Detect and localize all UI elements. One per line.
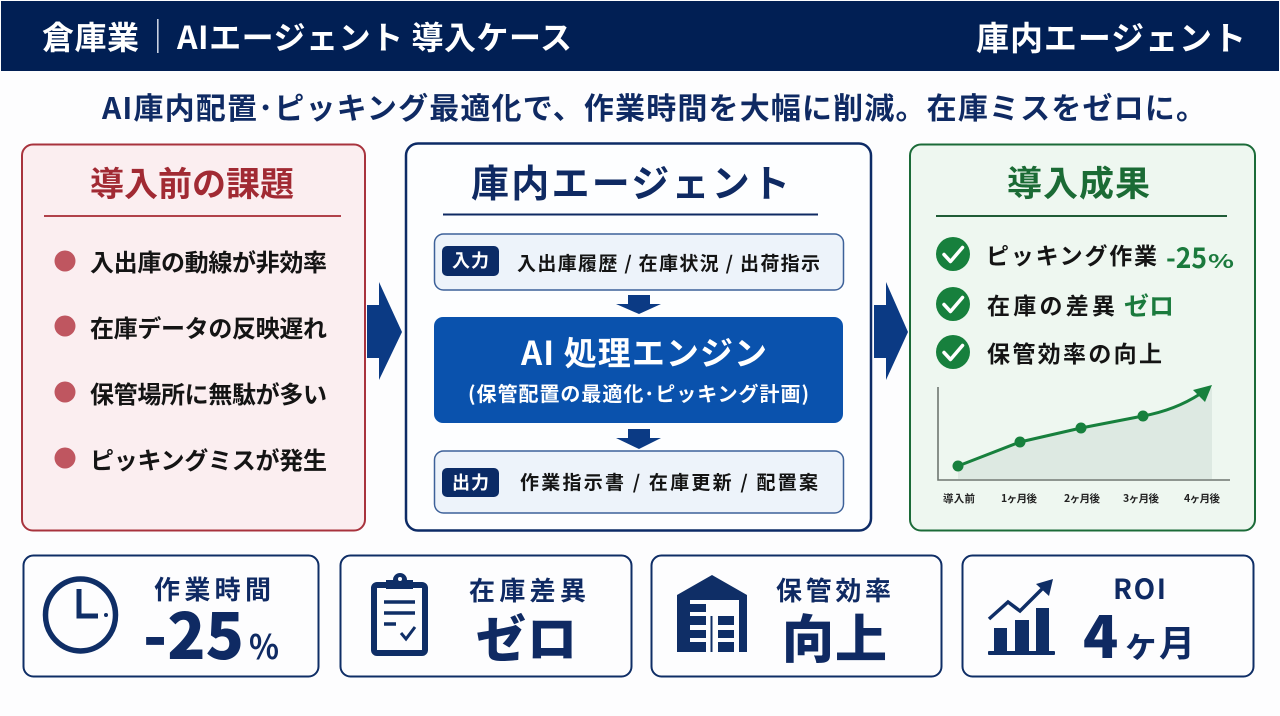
- subtitle: AI庫内配置･ピッキング最適化で、作業時間を大幅に削減。在庫ミスをゼロに。: [101, 84, 1206, 128]
- challenge item 3: 保管場所に無駄が多い: [90, 375, 327, 410]
- KPI value: [1083, 591, 1195, 675]
- line chart: improvement over 4 months: 4ヶ月後: [1184, 491, 1220, 506]
- KPI card: inventory variance: ゼロ: [476, 600, 577, 672]
- KPI card: inventory variance: 在庫差異: [469, 571, 586, 608]
- KPI value: %: [249, 620, 279, 669]
- input row: 入出庫履歴 / 在庫状況 / 出荷指示: [517, 249, 820, 276]
- KPI card: storage efficiency: 向上: [782, 598, 887, 673]
- arrow: input to engine: [616, 295, 661, 314]
- header right label: 庫内エージェント: [976, 12, 1246, 60]
- result item 1: %: [1208, 247, 1234, 274]
- result item 2: [936, 287, 1174, 323]
- result item 1: [936, 237, 1234, 277]
- KPI card: storage efficiency: [652, 556, 942, 676]
- KPI card: work time: [24, 556, 318, 678]
- arrow: challenges to agent: [367, 282, 402, 380]
- icon: clock: [46, 579, 116, 651]
- panel heading: agent: 庫内エージェント: [471, 153, 790, 208]
- result item 1: ピッキング作業: [986, 237, 1157, 271]
- KPI card: inventory variance: [340, 556, 632, 676]
- input badge: [442, 246, 499, 276]
- AI engine block: AI 処理エンジン: [520, 327, 767, 375]
- challenge item 4: ピッキングミスが発生: [90, 441, 327, 476]
- header title: AIエージェント 導入ケース: [176, 13, 572, 59]
- line chart: improvement over 4 months: 導入前: [943, 491, 976, 506]
- input row: [434, 234, 844, 290]
- panel heading: results: 導入成果: [1007, 156, 1150, 207]
- KPI card: work time: 作業時間: [154, 570, 271, 607]
- result item 2: 在庫の差異: [987, 287, 1115, 321]
- result item 1: -25: [1166, 237, 1207, 277]
- line chart: improvement over 4 months: 1ヶ月後: [1001, 491, 1038, 506]
- output row: [434, 451, 844, 513]
- result item 3: 保管効率の向上: [987, 335, 1162, 369]
- line chart: improvement over 4 months: 2ヶ月後: [1064, 491, 1100, 506]
- KPI card: ROI: ROI: [1113, 568, 1166, 608]
- output badge: [442, 468, 499, 497]
- arrow: engine to output: [616, 429, 661, 449]
- header bar: [1, 1, 1279, 71]
- icon: rising bar chart: [988, 579, 1055, 655]
- KPI card: ROI: [962, 556, 1254, 676]
- panel: before challenges: [22, 144, 365, 530]
- panel heading: challenges: 導入前の課題: [90, 157, 294, 206]
- line chart: improvement over 4 months: 3ヶ月後: [1123, 491, 1160, 506]
- AI engine block: (保管配置の最適化･ピッキング計画): [468, 378, 809, 407]
- header title: 倉庫業: [42, 13, 139, 59]
- KPI value: 4: [1083, 591, 1118, 675]
- panel: results: [910, 144, 1255, 530]
- arrow: agent to results: [874, 282, 908, 380]
- AI engine block: [434, 317, 843, 423]
- challenge item 1: 入出庫の動線が非効率: [90, 243, 327, 278]
- icon: clipboard: [374, 573, 425, 653]
- KPI value: -25: [143, 587, 244, 678]
- result item 2: ゼロ: [1124, 287, 1174, 323]
- output badge: 出力: [452, 469, 489, 495]
- icon: warehouse: [677, 575, 747, 652]
- output row: 作業指示書 / 在庫更新 / 配置案: [520, 468, 818, 495]
- KPI value: ヶ月: [1123, 615, 1195, 667]
- input badge: 入力: [452, 247, 489, 273]
- line chart: improvement over 4 months: [938, 385, 1230, 506]
- panel: warehouse agent: [406, 144, 871, 530]
- challenge item 2: 在庫データの反映遅れ: [90, 309, 327, 344]
- KPI card: storage efficiency: 保管効率: [776, 571, 891, 608]
